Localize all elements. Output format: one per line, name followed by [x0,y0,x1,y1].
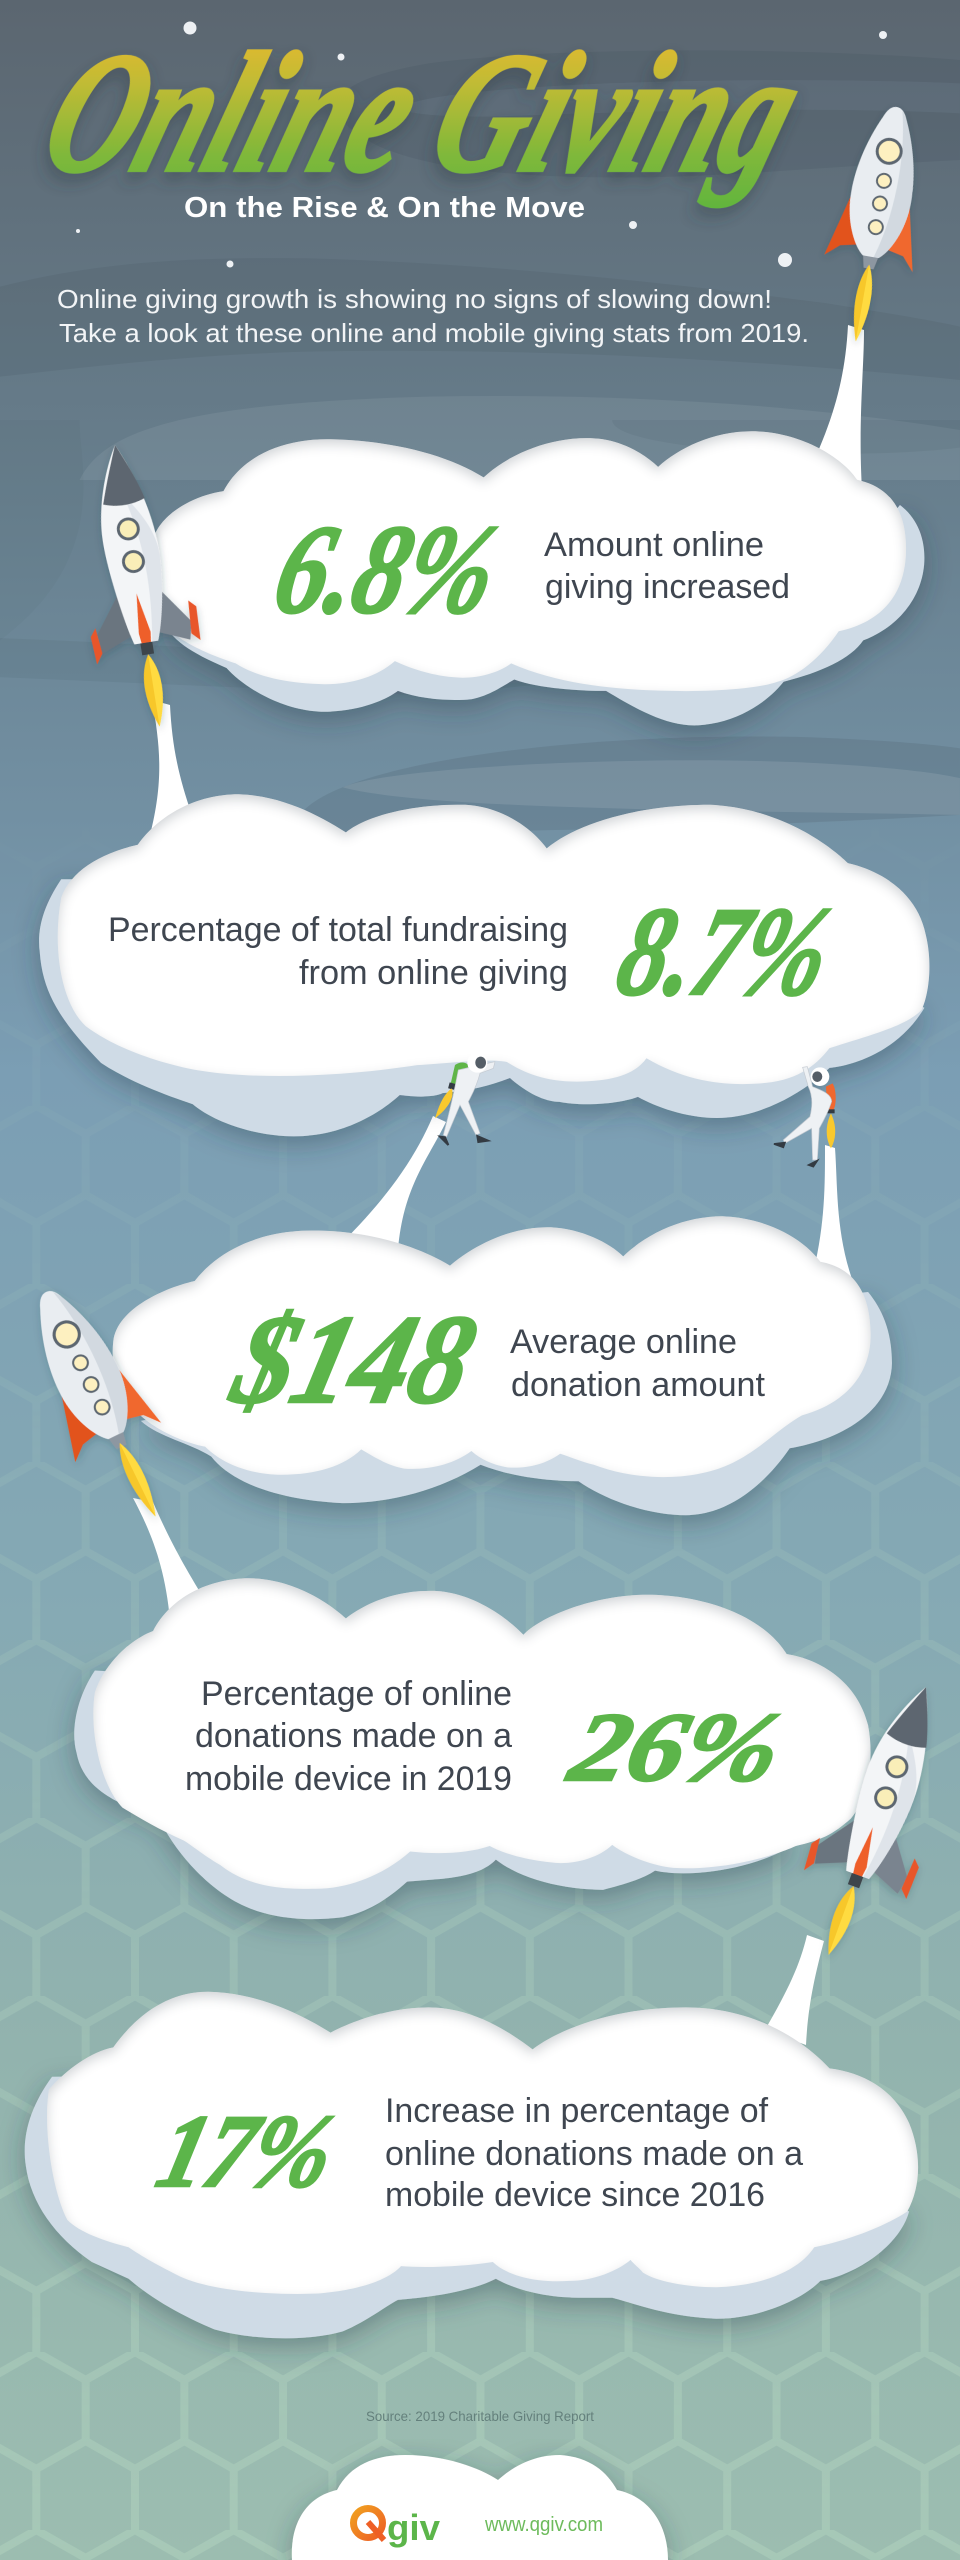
intro text [57,284,809,348]
stat 4 [185,1675,793,1802]
stat 5: online donations made on a [385,2135,803,2173]
stat 3: $148 [219,1289,488,1430]
source note: Source: 2019 Charitable Giving Report [366,2408,594,2424]
stat 1: Amount online [544,526,764,564]
stat 5: mobile device since 2016 [385,2176,765,2214]
rocket trails [133,325,864,2045]
panel: cloud 5 [25,1992,918,2338]
stat 4: Percentage of online [201,1675,512,1713]
stat 4: mobile device in 2019 [185,1760,512,1798]
rocket: right of cloud 4 [778,1669,960,1974]
rocket: left of cloud 1 [62,436,214,735]
subtitle: On the Rise & On the Move [184,192,585,224]
stat 3 [219,1289,766,1430]
logo: Qgiv: giv [387,2507,440,2548]
stat 5: Increase in percentage of [385,2092,769,2130]
stat 5 [147,2092,803,2214]
stat 2 [108,881,845,1022]
rocket: top right [810,99,940,349]
stat 4: donations made on a [195,1717,512,1755]
stat 1: 6.8% [262,499,512,640]
astronaut with orange jetpack [774,1067,836,1167]
stat 4: 26% [558,1692,793,1802]
stat 3: donation amount [511,1366,766,1404]
background swirls [0,50,960,833]
panel: cloud 4 [74,1578,871,1919]
stat 1: giving increased [545,568,790,606]
logo: Qgiv [354,2507,440,2548]
stat 5: 17% [147,2093,346,2209]
panel: cloud 2 [39,794,929,1136]
stat 3: Average online [510,1323,737,1361]
stat 1 [262,499,790,640]
stat 2: from online giving [299,954,568,992]
website: www.qgiv.com [484,2514,603,2536]
background hexagon pattern [0,1632,960,2560]
stars [76,22,887,268]
panel: cloud 1 [153,431,924,725]
footer cloud [292,2455,668,2560]
intro text: Take a look at these online and mobile giving stats from 2019. [59,318,809,348]
stat 2: 8.7% [605,881,845,1022]
astronaut with green jetpack [435,1053,495,1145]
stat 2: Percentage of total fundraising [108,911,568,949]
panel: cloud 3 [113,1216,892,1515]
intro text: Online giving growth is showing no signs of slowing down! [57,284,772,314]
rocket: left of cloud 3 [3,1272,197,1538]
